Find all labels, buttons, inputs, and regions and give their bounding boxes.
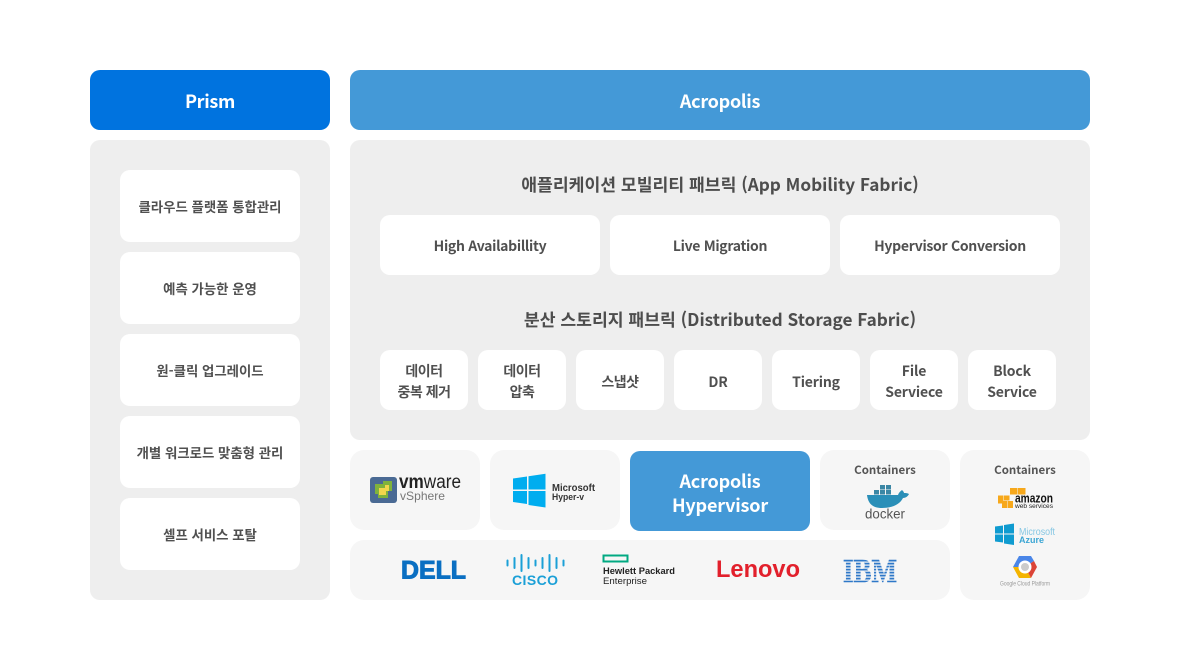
icon: google cloud platform logo <box>1000 556 1050 588</box>
icon: lenovo logo: Lenovo <box>716 556 800 583</box>
card: snapshot: 스냅샷 <box>601 372 639 392</box>
card: deduplication <box>380 350 468 410</box>
card: Block Service: Service <box>987 382 1037 402</box>
icon: microsoft azure logo <box>995 524 1055 546</box>
card: Tiering: Tiering <box>792 372 840 392</box>
icon: hewlett packard enterprise logo: Hewlett Packard <box>603 566 675 577</box>
panel: Acropolis Hypervisor <box>630 451 810 531</box>
header: Acropolis <box>350 70 1090 130</box>
card: snapshot <box>576 350 664 410</box>
panel: server vendors <box>350 540 950 600</box>
icon: hewlett packard enterprise logo: Enterprise <box>603 576 647 587</box>
header: Prism <box>90 70 330 130</box>
card: predictable operations <box>120 252 300 324</box>
panel: Acropolis fabrics <box>350 140 1090 440</box>
panel: VMware vSphere <box>350 450 480 530</box>
card: one-click upgrade <box>120 334 300 406</box>
card: File Service <box>870 350 958 410</box>
panel: Acropolis Hypervisor: Acropolis <box>679 468 761 494</box>
icon: vmware logo: vmware <box>399 472 461 493</box>
card: Hypervisor Conversion <box>840 215 1060 275</box>
card: per-workload management: 개별 워크로드 맞춤형 관리 <box>137 442 283 462</box>
card: deduplication: 중복 제거 <box>398 382 450 402</box>
card: one-click upgrade: 원-클릭 업그레이드 <box>156 360 264 380</box>
header: Acropolis: Acropolis <box>680 88 760 114</box>
card: Block Service: Block <box>993 361 1031 381</box>
icon: docker logo: docker <box>865 506 905 522</box>
icon: amazon web services logo: web services <box>1014 503 1054 510</box>
card: cloud platform management <box>120 170 300 242</box>
icon: cisco logo <box>506 554 564 588</box>
icon: vmware logo <box>370 472 461 503</box>
card: Block Service <box>968 350 1056 410</box>
card: File Service: Serviece <box>885 382 943 402</box>
card: self-service portal <box>120 498 300 570</box>
heading: Distributed Storage Fabric: 분산 스토리지 패브릭 (Distributed Storage Fabric) <box>524 306 916 331</box>
heading: App Mobility Fabric: 애플리케이션 모빌리티 패브릭 (App Mobility Fabric) <box>521 171 919 196</box>
icon: amazon web services logo <box>998 488 1054 510</box>
panel: Microsoft Hyper-V <box>490 450 620 530</box>
icon: hyper-v logo <box>513 474 595 508</box>
panel: Containers docker <box>820 450 950 530</box>
card: High Availability: High Availabillity <box>434 236 546 256</box>
icon: docker logo <box>865 485 909 522</box>
card: File Service: File <box>902 361 926 381</box>
card: self-service portal: 셀프 서비스 포탈 <box>163 524 257 544</box>
card: per-workload management <box>120 416 300 488</box>
panel: Prism features <box>90 140 330 600</box>
label: Containers: Containers <box>854 462 916 478</box>
panel: Containers clouds <box>960 450 1090 600</box>
card: cloud platform management: 클라우드 플랫폼 통합관리 <box>138 196 282 216</box>
card: Hypervisor Conversion: Hypervisor Conversion <box>874 236 1026 256</box>
card: predictable operations: 예측 가능한 운영 <box>163 278 257 298</box>
card: Tiering <box>772 350 860 410</box>
card: deduplication: 데이터 <box>405 361 443 381</box>
card: compression: 데이터 <box>503 361 541 381</box>
panel: Acropolis Hypervisor: Hypervisor <box>672 492 768 518</box>
icon: dell logo: DELL <box>401 556 466 584</box>
card: compression: 압축 <box>510 382 534 402</box>
card: compression <box>478 350 566 410</box>
header: Prism: Prism <box>185 88 235 114</box>
card: Live Migration: Live Migration <box>673 236 767 256</box>
icon: hewlett packard enterprise logo <box>602 554 675 587</box>
icon: google cloud platform logo: Google Cloud Platform <box>1000 582 1050 588</box>
icon: hyper-v logo: Microsoft <box>552 482 595 494</box>
icon: vmware logo: vSphere <box>400 489 445 503</box>
icon: microsoft azure logo: Microsoft <box>1019 527 1055 538</box>
icon: cisco logo: CISCO <box>512 572 558 588</box>
icon: ibm logo: IBM <box>843 553 897 590</box>
card: Live Migration <box>610 215 830 275</box>
label: Containers: Containers <box>994 462 1056 478</box>
card: High Availability <box>380 215 600 275</box>
icon: microsoft azure logo: Azure <box>1019 535 1044 546</box>
card: DR: DR <box>708 372 728 392</box>
icon: amazon web services logo: amazon <box>1015 492 1053 506</box>
icon: hyper-v logo: Hyper-v <box>552 492 585 503</box>
card: DR <box>674 350 762 410</box>
